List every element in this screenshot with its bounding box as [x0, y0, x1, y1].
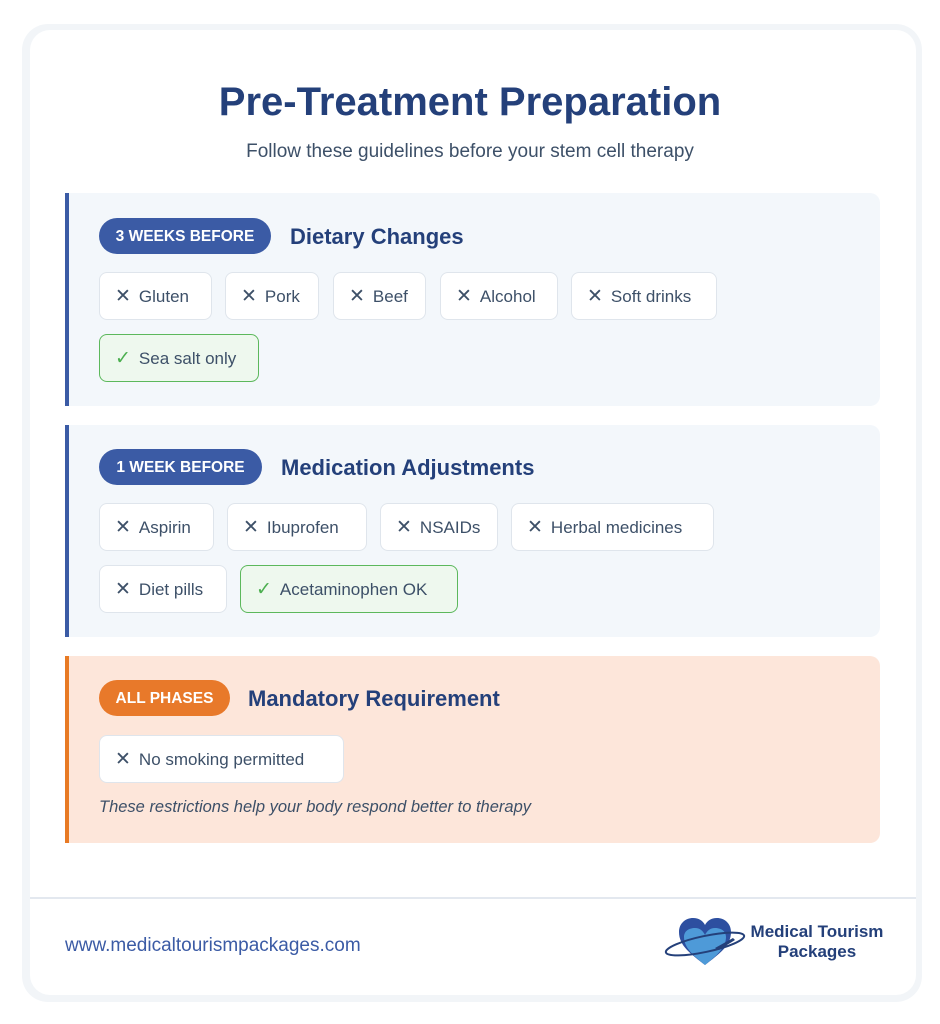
chip: diet pills: ✕ Diet pills	[115, 579, 203, 600]
logo text: Medical Tourism	[751, 922, 883, 941]
chip: gluten: ✕ Gluten	[115, 286, 189, 307]
chip: alcohol	[440, 272, 558, 320]
chip: ibuprofen: ✕ Ibuprofen	[243, 517, 339, 538]
subtitle: Follow these guidelines before your stem cell therapy	[246, 141, 694, 162]
badge: 3 weeks before	[99, 218, 271, 254]
chip: soft drinks: ✕ Soft drinks	[587, 286, 691, 307]
panel: medication adjustments	[65, 425, 880, 637]
chip: pork	[225, 272, 319, 320]
title: Pre-Treatment Preparation	[219, 80, 721, 124]
chip: diet pills	[99, 565, 227, 613]
logo text	[751, 922, 883, 961]
chip: beef	[333, 272, 426, 320]
chip: sea salt only: ✓ Sea salt only	[115, 348, 236, 369]
chip: soft drinks	[571, 272, 717, 320]
chip: acetaminophen ok	[240, 565, 458, 613]
chip: gluten	[99, 272, 212, 320]
chip: aspirin	[99, 503, 214, 551]
heading: mandatory requirement: Mandatory Requirement	[248, 686, 500, 711]
badge: all phases: ALL PHASES	[116, 690, 213, 707]
badge: all phases	[99, 680, 230, 716]
logo	[664, 918, 883, 965]
panel: mandatory requirement	[65, 656, 880, 843]
chip: nsaids	[380, 503, 498, 551]
badge: 1 week before	[99, 449, 262, 485]
chip: sea salt only	[99, 334, 259, 382]
chip: no smoking: ✕ No smoking permitted	[115, 749, 304, 770]
chip: acetaminophen ok: ✓ Acetaminophen OK	[256, 579, 427, 600]
badge: 3 weeks before: 3 WEEKS BEFORE	[116, 228, 254, 245]
icon: heart with plane	[664, 918, 746, 965]
note: These restrictions help your body respond better to therapy	[99, 798, 531, 816]
heading: medication adjustments: Medication Adjustments	[281, 455, 534, 480]
chip: ibuprofen	[227, 503, 367, 551]
badge: 1 week before: 1 WEEK BEFORE	[116, 459, 245, 476]
heading: dietary changes: Dietary Changes	[290, 224, 464, 249]
chip: pork: ✕ Pork	[241, 286, 300, 307]
chip: beef: ✕ Beef	[349, 286, 408, 307]
chip: herbal medicines: ✕ Herbal medicines	[527, 517, 682, 538]
chip: alcohol: ✕ Alcohol	[456, 286, 536, 307]
logo text: Packages	[778, 942, 856, 961]
chip: nsaids: ✕ NSAIDs	[396, 517, 480, 538]
panel: dietary changes	[65, 193, 880, 406]
chip: herbal medicines	[511, 503, 714, 551]
footer url: www.medicaltourismpackages.com	[65, 935, 361, 956]
chip: no smoking	[99, 735, 344, 783]
chip: aspirin: ✕ Aspirin	[115, 517, 191, 538]
